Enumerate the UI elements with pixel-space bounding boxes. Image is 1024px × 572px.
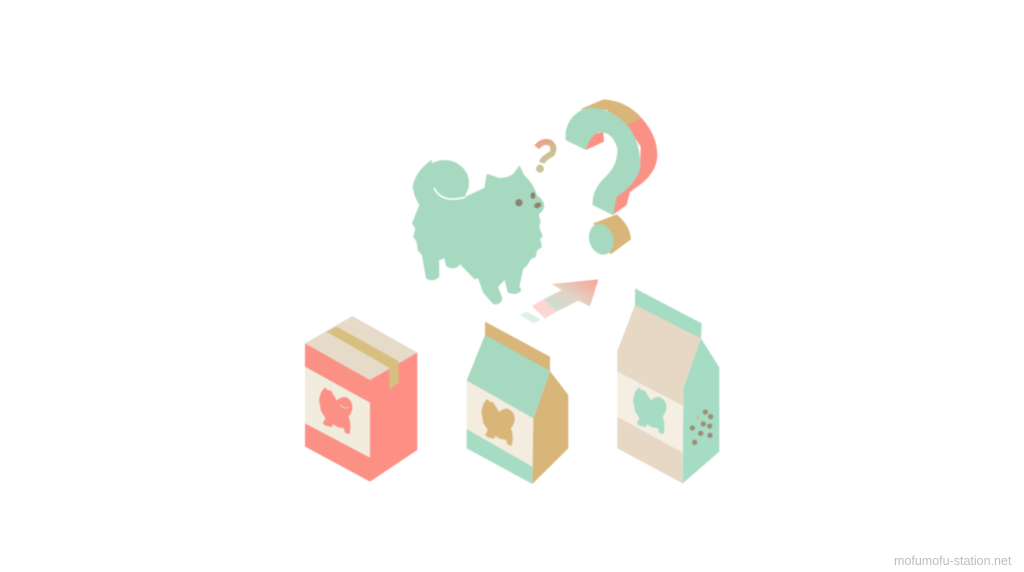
mint front face — [566, 108, 640, 215]
bag dog silhouette — [482, 400, 514, 445]
dog — [413, 161, 544, 304]
box dog tail line — [340, 404, 349, 408]
bag upper face — [467, 335, 550, 418]
dog eye near — [515, 199, 523, 206]
dot depth — [593, 214, 631, 254]
salmon side depth — [613, 118, 657, 215]
arrow pale dash — [520, 312, 541, 323]
arrow pink segment — [532, 299, 557, 318]
red box — [305, 316, 417, 482]
dog eye far — [531, 192, 535, 199]
box left face — [305, 343, 370, 482]
bag label band — [467, 381, 533, 467]
large question mark — [566, 99, 657, 258]
beige bag label band — [617, 372, 683, 453]
box label band — [305, 367, 370, 458]
arrow — [520, 279, 598, 323]
inner hook depth — [586, 132, 604, 150]
dog nose — [533, 201, 542, 209]
kibble dots — [690, 409, 713, 445]
box right face — [370, 353, 417, 482]
mint bag — [467, 322, 568, 484]
beige bag lower face — [617, 417, 683, 483]
beige bag dog silhouette — [634, 388, 666, 433]
bag side — [532, 371, 568, 484]
beige bag upper face — [617, 305, 701, 406]
dog tail highlight — [434, 188, 464, 199]
gold top depth — [580, 99, 642, 126]
beige bag side — [683, 338, 719, 483]
beige bag — [617, 288, 719, 483]
box top — [305, 316, 417, 380]
arrow head and shaft — [543, 279, 598, 312]
dot face — [585, 221, 618, 258]
box dog silhouette — [320, 388, 352, 433]
box tape — [327, 327, 399, 389]
small question mark — [536, 142, 553, 173]
bag lower face — [467, 429, 532, 484]
bag top seal — [485, 322, 550, 372]
dog body — [413, 161, 544, 304]
watermark: mofumofu-station.net — [894, 554, 1011, 568]
beige bag top seal — [635, 288, 702, 339]
